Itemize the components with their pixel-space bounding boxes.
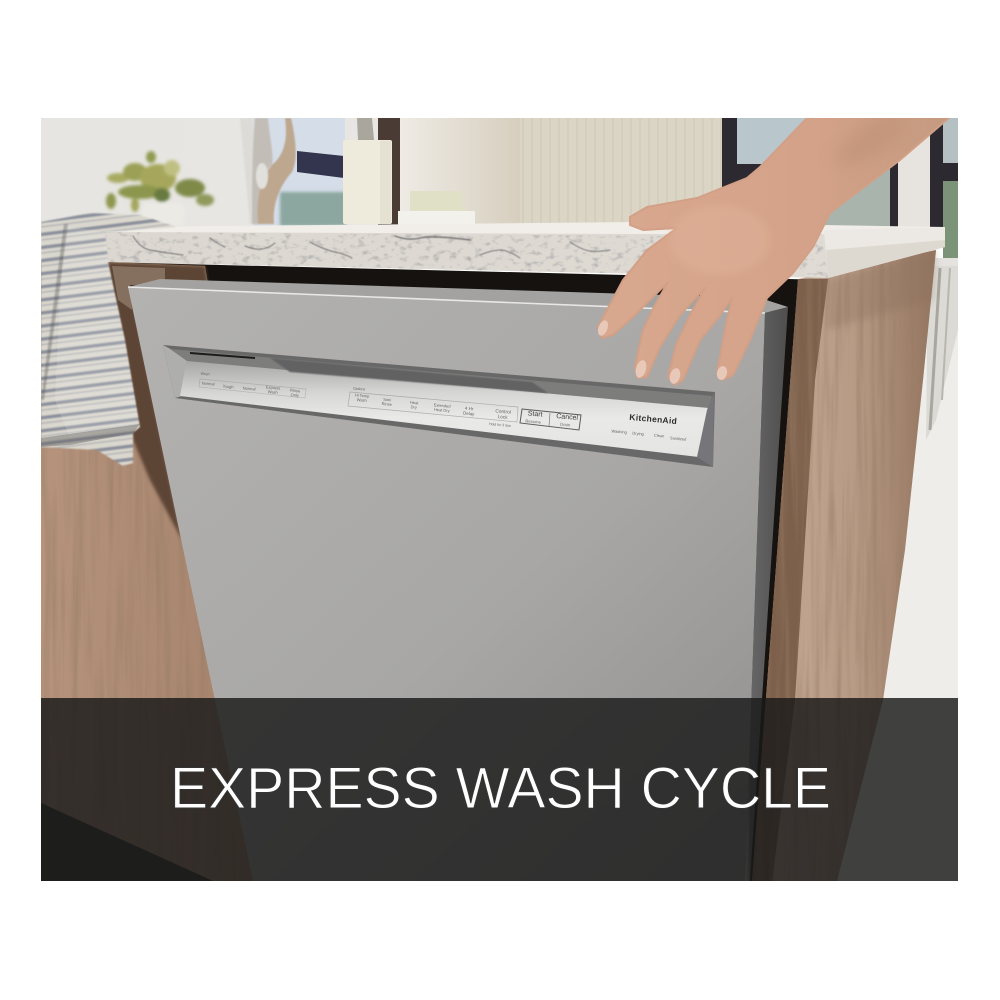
panel labels: Clean xyxy=(654,433,665,438)
panel labels: Sanitized xyxy=(670,435,687,442)
panel labels: Control xyxy=(495,409,511,416)
panel labels: Heat xyxy=(410,400,419,405)
soap dish xyxy=(398,191,475,225)
floor right xyxy=(884,258,958,698)
panel labels: Normal xyxy=(201,380,215,387)
stone veins xyxy=(133,236,610,258)
potted plant xyxy=(104,149,216,214)
panel labels: Rinse xyxy=(290,388,300,393)
panel labels: Hold for 3 Sec xyxy=(489,422,512,428)
panel labels: Wash xyxy=(357,397,367,403)
left wood cabinet xyxy=(41,262,254,881)
panel labels: Tough xyxy=(222,384,234,389)
panel labels: Lock xyxy=(497,414,509,421)
infographic: express wash cycle photo xyxy=(41,118,958,881)
soap dispenser xyxy=(343,118,392,224)
panel labels: Extended xyxy=(433,402,451,409)
panel labels: Wash xyxy=(268,389,278,395)
panel labels: Express xyxy=(266,384,281,391)
dishwasher door xyxy=(128,279,788,881)
panel labels: Drying xyxy=(632,431,644,437)
panel labels: Only xyxy=(290,392,299,398)
panel labels: Wash xyxy=(200,372,210,376)
control panel recess xyxy=(163,345,715,467)
panel labels: Resume xyxy=(525,418,542,425)
panel labels: Washing xyxy=(611,428,627,435)
photo xyxy=(41,105,958,881)
panel labels: Delay xyxy=(463,410,475,417)
countertop xyxy=(105,222,945,278)
hand shading xyxy=(668,226,762,258)
dark caption band xyxy=(41,698,958,881)
panel labels: Dry xyxy=(410,404,417,410)
panel labels: Heat Dry xyxy=(434,407,450,413)
hand and arm xyxy=(596,105,950,385)
panel labels: Cancel xyxy=(556,413,579,422)
panel labels: Drain xyxy=(560,422,571,427)
window behind faucet xyxy=(253,118,346,226)
panel labels: Normal xyxy=(242,385,256,392)
background wall and window xyxy=(41,118,958,258)
panel labels: 4 Hr xyxy=(465,406,474,411)
right wood cabinet xyxy=(752,250,936,881)
towel xyxy=(41,213,177,466)
panel labels: Options xyxy=(353,386,366,392)
window post xyxy=(378,118,400,226)
fingernails xyxy=(596,319,729,385)
title: EXPRESS WASH CYCLE xyxy=(170,756,831,821)
dark recess under counter xyxy=(100,262,830,881)
panel labels: Rinse xyxy=(381,401,393,407)
panel labels: Start xyxy=(527,410,543,419)
faucet xyxy=(240,118,296,224)
panel button outlines xyxy=(199,379,581,430)
panel labels: KitchenAid xyxy=(629,412,678,426)
panel labels xyxy=(200,372,687,442)
panel labels: Hi Temp xyxy=(355,392,370,399)
panel labels: Sani xyxy=(383,397,391,402)
